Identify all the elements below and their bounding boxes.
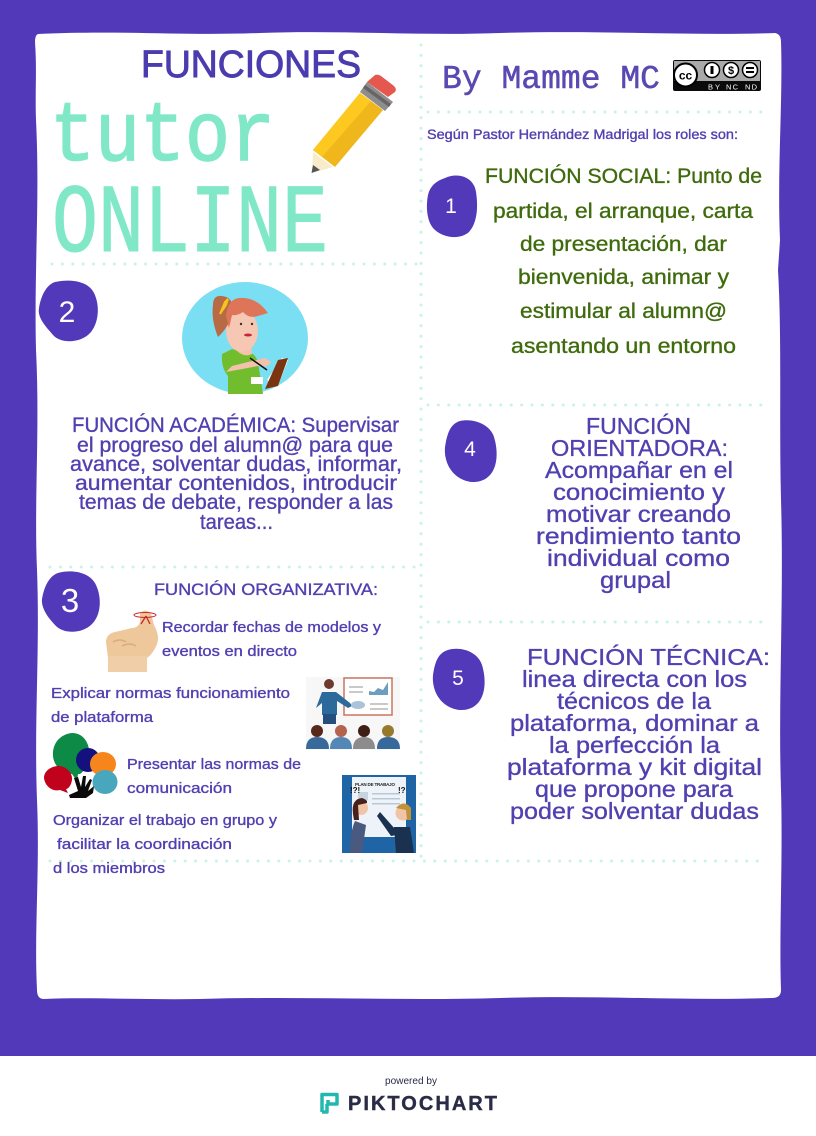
- heading: tutor: tutor: [50, 91, 275, 186]
- text: funcion social: FUNCIÓN SOCIAL: Punto de: [485, 165, 762, 188]
- icon: work plan: PLAN DE TRABAJO: [355, 782, 395, 787]
- text: funcion orientadora: FUNCIÓN: [586, 413, 691, 439]
- text: funcion orientadora: conocimiento y: [553, 479, 726, 505]
- number badge 1: 1: [445, 195, 457, 218]
- icon: work plan: !?: [398, 786, 406, 795]
- heading: organizativa: FUNCIÓN ORGANIZATIVA:: [154, 580, 378, 599]
- icon: creative commons badge: [673, 60, 761, 92]
- text: funcion tecnica: linea directa con los: [522, 666, 747, 692]
- white card: [35, 32, 782, 999]
- text: funcion tecnica: la perfección la: [549, 732, 720, 758]
- item: explicar: [51, 685, 290, 726]
- number badge 2: [39, 281, 98, 341]
- author credit: By Mamme MC: [442, 61, 660, 98]
- text: funcion academica: el progreso del alumn@ para que: [77, 434, 393, 457]
- icon: creative commons badge: cc: [679, 68, 692, 82]
- text: funcion orientadora: [536, 413, 741, 593]
- item: recordar: [162, 619, 382, 660]
- text: funcion tecnica: técnicos de la: [557, 688, 711, 714]
- icon: finger with ribbon: [106, 610, 158, 672]
- dotted dividers: [50, 45, 765, 861]
- number badge 5: 5: [452, 667, 464, 690]
- item: organizar: d los miembros: [53, 860, 165, 877]
- text: funcion social: de presentación, dar: [520, 233, 727, 256]
- text: funcion social: partida, el arranque, carta: [493, 200, 753, 223]
- text: funcion tecnica: [507, 644, 770, 824]
- icon: creative commons badge: BY: [708, 82, 720, 92]
- text: funcion academica: tareas...: [200, 511, 273, 534]
- icon: presenter with audience: [306, 677, 400, 750]
- text: funcion orientadora: ORIENTADORA:: [551, 435, 728, 461]
- text: funcion orientadora: rendimiento tanto: [536, 523, 741, 549]
- title: [50, 44, 361, 281]
- illustration: tutor woman: [182, 282, 308, 394]
- heading: funciones: FUNCIONES: [141, 44, 361, 86]
- footer wordmark: PIKTOCHART: [348, 1093, 497, 1115]
- text: funcion orientadora: Acompañar en el: [545, 457, 733, 483]
- item: explicar: Explicar normas funcionamiento: [51, 685, 290, 702]
- text: funcion tecnica: que propone para: [535, 776, 733, 802]
- item: presentar: [127, 756, 301, 797]
- text: funcion tecnica: plataforma, dominar a: [510, 710, 759, 736]
- footer: powered by piktochart: [322, 1076, 497, 1115]
- icon: work plan: [342, 775, 416, 853]
- text: funcion orientadora: motivar creando: [546, 501, 731, 527]
- icon: work plan: !?!: [350, 786, 360, 795]
- text: funcion orientadora: individual como: [547, 545, 730, 571]
- item: organizar: [53, 812, 278, 877]
- number badge 2: 2: [59, 296, 75, 329]
- text: funcion tecnica: plataforma y kit digital: [507, 754, 762, 780]
- item: presentar: comunicación: [127, 780, 232, 797]
- text: funcion academica: temas de debate, responder a las: [79, 491, 393, 514]
- icon: speech bubbles and hand: [44, 733, 118, 798]
- text: funcion social: asentando un entorno: [511, 335, 736, 358]
- number badge 5: [433, 649, 485, 710]
- text: funcion social: estimular al alumn@: [520, 300, 727, 323]
- number badge 3: 3: [61, 582, 79, 619]
- text: funcion orientadora: grupal: [600, 567, 671, 593]
- text: funcion social: bienvenida, animar y: [518, 266, 730, 289]
- text: funcion academica: [70, 414, 402, 534]
- text: funcion tecnica: poder solventar dudas: [510, 798, 759, 824]
- icon: pencil: [312, 75, 396, 173]
- text: funcion organizativa: [51, 580, 382, 877]
- item: recordar: eventos en directo: [162, 643, 297, 660]
- icon: creative commons badge: NC: [726, 82, 739, 92]
- icon: piktochart logo: [322, 1094, 337, 1112]
- icon: creative commons badge: $: [728, 65, 734, 77]
- number badge 1: [427, 176, 477, 237]
- text: funcion academica: aumentar contenidos, introducir: [75, 472, 397, 495]
- icon: creative commons badge: ND: [745, 82, 758, 92]
- item: organizar: facilitar la coordinación: [57, 836, 232, 853]
- number badge 4: 4: [464, 438, 476, 461]
- number badge 3: [42, 571, 100, 632]
- text: funcion social: [485, 165, 762, 358]
- text: funcion academica: avance, solventar dudas, informar,: [70, 453, 402, 476]
- item: presentar: Presentar las normas de: [127, 756, 301, 773]
- intro text: Según Pastor Hernández Madrigal los roles son:: [427, 127, 738, 142]
- number badge 4: [445, 420, 497, 482]
- item: recordar: Recordar fechas de modelos y: [162, 619, 382, 636]
- text: funcion tecnica: FUNCIÓN TÉCNICA:: [527, 644, 770, 670]
- text: funcion academica: FUNCIÓN ACADÉMICA: Supervisar: [72, 414, 399, 437]
- footer caption: powered by: [385, 1076, 437, 1087]
- item: explicar: de plataforma: [51, 709, 154, 726]
- item: organizar: Organizar el trabajo en grupo y: [53, 812, 278, 829]
- heading: online: ONLINE: [52, 171, 328, 281]
